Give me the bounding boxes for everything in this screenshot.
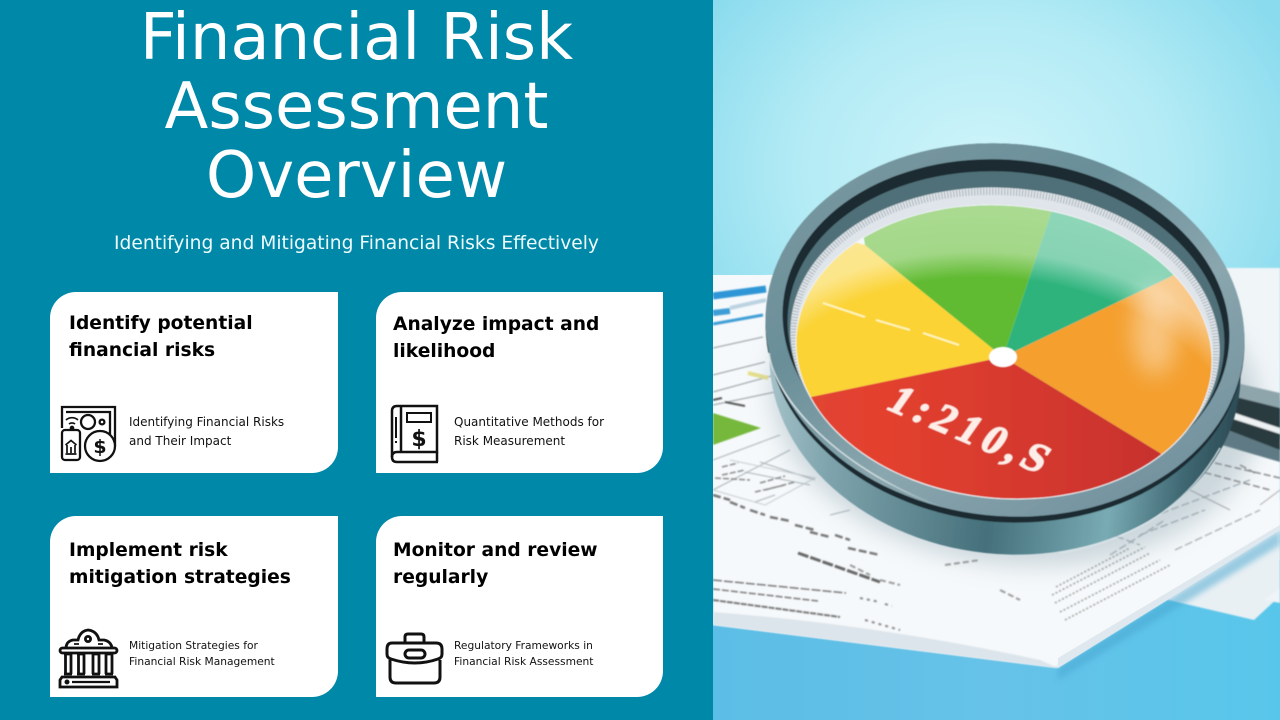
dial edge tick ring <box>777 170 1233 512</box>
heading: implement: mitigation strategies <box>69 567 291 588</box>
sky background <box>713 0 1280 720</box>
panel: analyze card <box>376 292 663 473</box>
heading: analyze: likelihood <box>393 341 495 362</box>
segment: orange <box>1013 274 1212 454</box>
heading: identify: financial risks <box>69 340 215 361</box>
title: Financial Risk <box>140 1 573 75</box>
title <box>140 1 573 213</box>
icon: money and phone: $ <box>93 436 107 458</box>
caption: identify: Identifying Financial Risks <box>129 415 284 429</box>
rim edge highlight <box>769 353 944 508</box>
dial reading: 1:210,S <box>878 377 1065 484</box>
heading: monitor: Monitor and review <box>393 540 598 561</box>
icon: bank building <box>58 628 118 688</box>
heading: analyze: Analyze impact and <box>393 314 599 335</box>
paper: main report sheet <box>713 275 1280 680</box>
panel: monitor card <box>376 516 663 697</box>
heading: identify: Identify potential <box>69 313 253 334</box>
caption: analyze <box>454 415 604 448</box>
segment: green <box>864 204 1052 350</box>
segment: red <box>810 359 1162 500</box>
magnifier handle <box>1222 382 1280 462</box>
metal rim <box>747 120 1263 540</box>
dial white edge <box>783 187 1225 517</box>
segment: teal <box>1006 211 1174 352</box>
panel: magnifying glass photo illustration <box>713 0 1280 720</box>
heading: analyze <box>393 314 599 362</box>
heading: identify <box>69 313 253 361</box>
caption: implement: Financial Risk Management <box>129 655 275 668</box>
orange highlight <box>1133 284 1177 376</box>
icon: money and phone <box>60 406 116 462</box>
lens shadow <box>754 210 1276 590</box>
heading: monitor <box>393 540 598 588</box>
icon: ledger book: $ <box>411 427 427 452</box>
panel: implement card <box>50 516 338 697</box>
subtitle: Identifying and Mitigating Financial Risks Effectively <box>114 233 599 254</box>
lens barrel <box>751 154 1259 578</box>
icon: ledger book <box>390 404 438 464</box>
caption: identify <box>129 415 284 448</box>
caption: analyze: Risk Measurement <box>454 434 565 448</box>
panel: identify card <box>50 292 338 473</box>
caption: identify: and Their Impact <box>129 434 231 448</box>
green chart wedge <box>713 413 761 445</box>
report charts and table marks <box>713 289 1280 630</box>
glass glare <box>798 205 1211 367</box>
risk gauge dial <box>796 204 1212 500</box>
heading: monitor: regularly <box>393 567 488 588</box>
paper: rear sheet <box>1160 268 1280 620</box>
icon: briefcase <box>386 632 444 684</box>
blue desk surface <box>713 560 1280 720</box>
inner bevel <box>771 150 1241 514</box>
magnifier body <box>764 142 1246 556</box>
inner dark rim <box>766 137 1246 513</box>
barrel highlight <box>1060 448 1220 553</box>
title: Assessment <box>165 70 548 144</box>
caption: implement: Mitigation Strategies for <box>129 639 258 652</box>
caption: analyze: Quantitative Methods for <box>454 415 604 429</box>
caption: monitor <box>454 639 594 668</box>
title: Overview <box>206 139 507 213</box>
dial centre pin <box>989 347 1017 367</box>
heading: implement <box>69 540 291 588</box>
caption: monitor: Financial Risk Assessment <box>454 655 593 668</box>
caption: implement <box>129 639 275 668</box>
heading: implement: Implement risk <box>69 540 228 561</box>
segment: yellow <box>796 242 994 398</box>
panel: left teal background <box>0 0 713 720</box>
dashed needle line <box>823 303 959 345</box>
caption: monitor: Regulatory Frameworks in <box>454 639 593 652</box>
